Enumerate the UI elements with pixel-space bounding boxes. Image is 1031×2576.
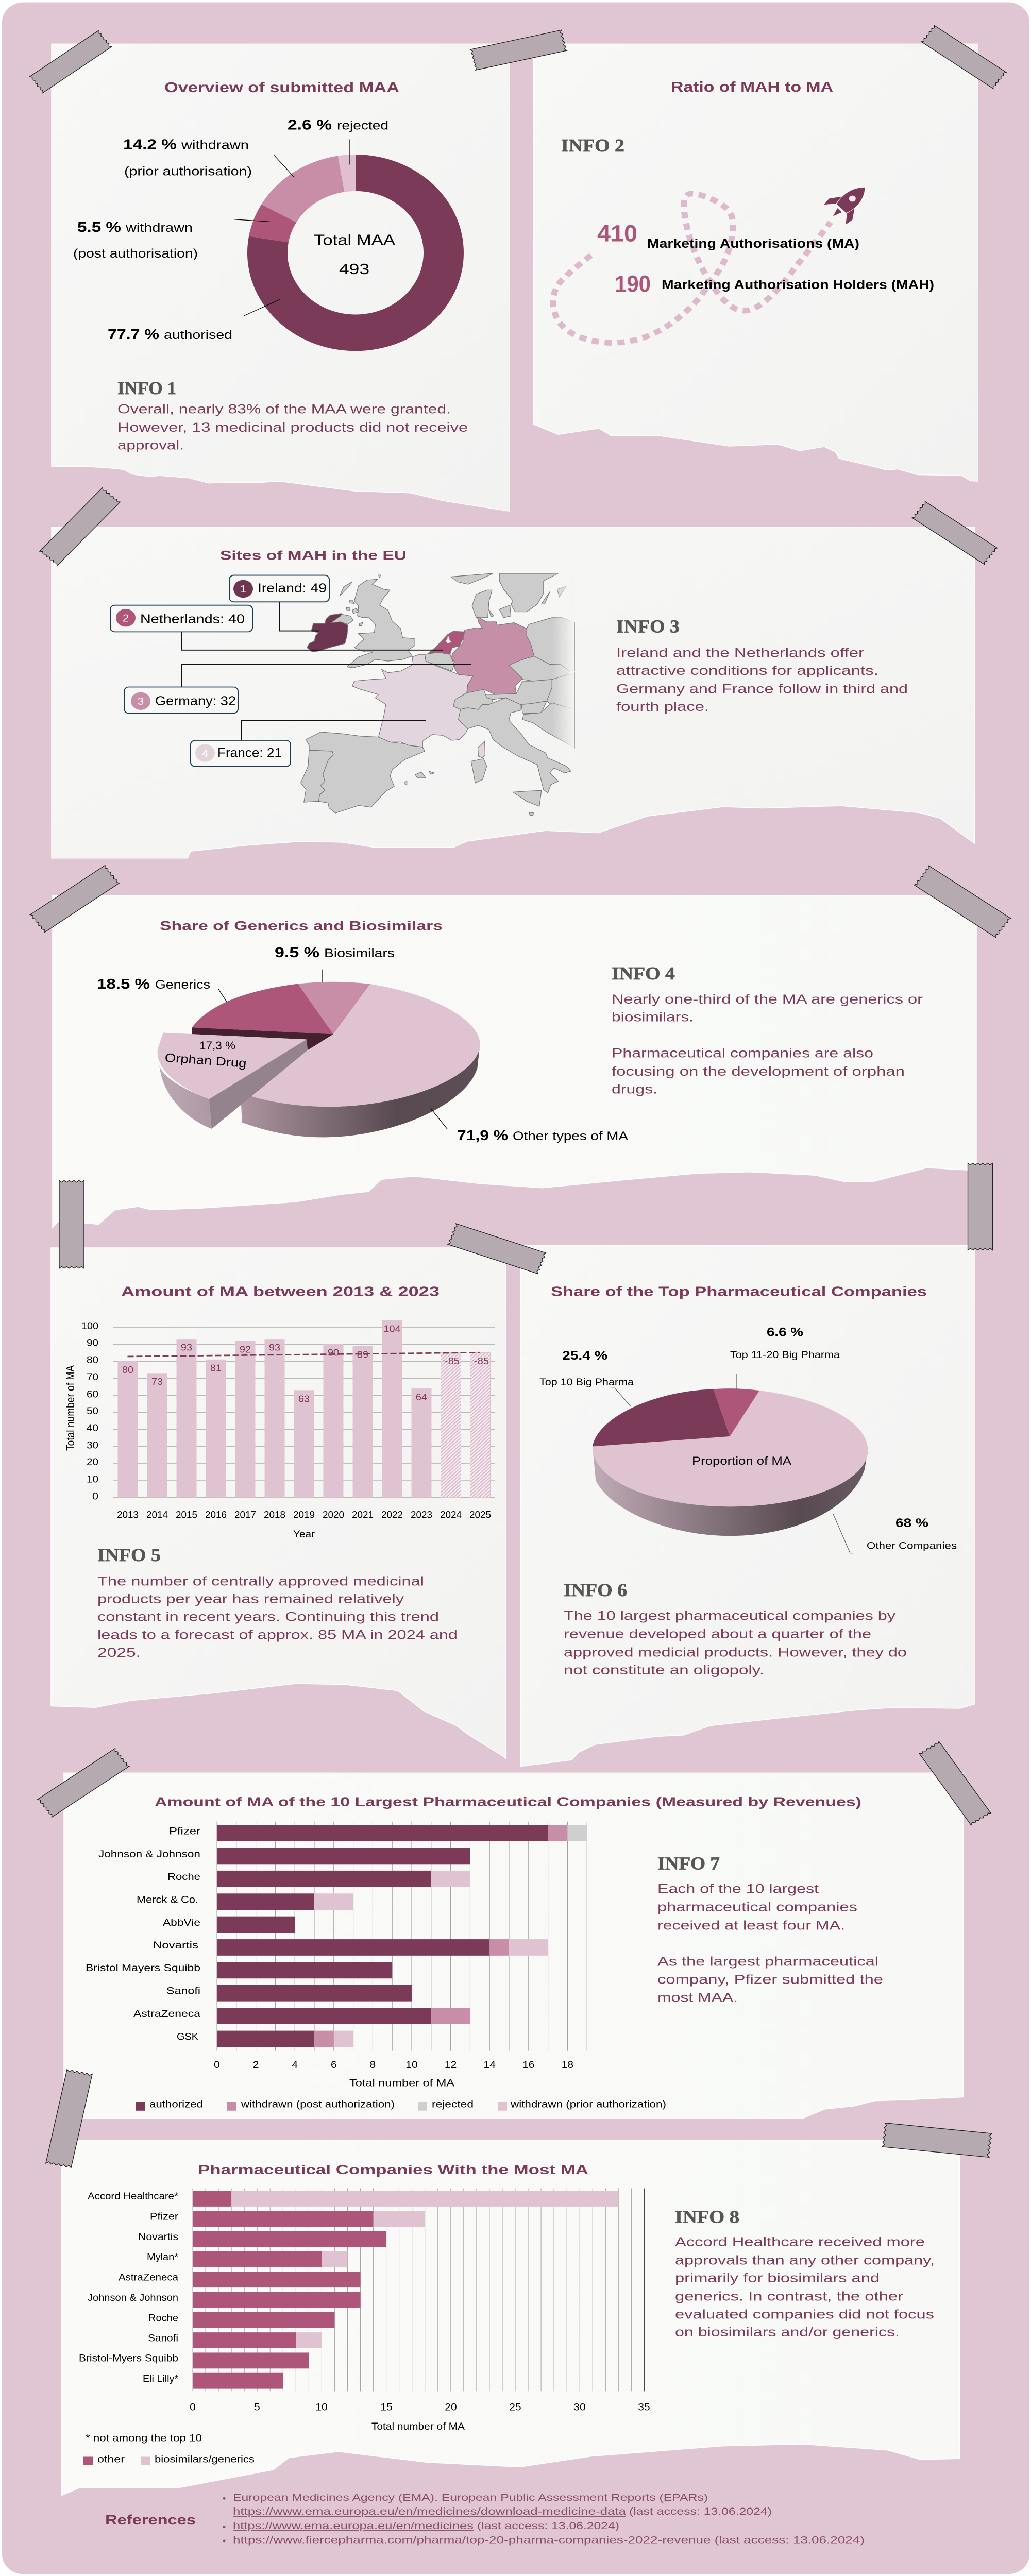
references list	[223, 2493, 865, 2546]
info 6 heading: INFO 6	[564, 1581, 627, 1600]
callout: Germany: Germany: 32	[155, 694, 236, 708]
x axis labels: 2014	[146, 1510, 168, 1520]
label: top 10: Top 10 Big Pharma	[539, 1377, 634, 1388]
x axis labels: 2025	[469, 1510, 491, 1520]
x axis labels: 35	[638, 2402, 650, 2413]
panel: share of the top pharmaceutical companies	[520, 1245, 974, 1767]
panel: sites of MAH in the EU	[52, 527, 975, 858]
donut chart	[247, 155, 464, 351]
company labels: Eli Lilly*	[143, 2374, 178, 2384]
references list: European Medicines Agency (EMA). European Public Assessment Reports (EPARs)	[233, 2493, 708, 2503]
donut centre label	[314, 232, 396, 278]
info 1 text: However, 13 medicinal products did not receive	[117, 421, 468, 435]
bar chart: MA per year: 89	[357, 1350, 368, 1360]
bar chart: MA per year: ~85	[471, 1357, 489, 1367]
label: biosimilars: Biosimilars	[324, 947, 395, 960]
label: withdrawn post	[73, 219, 198, 261]
x axis labels: 4	[292, 2060, 298, 2071]
x axis labels	[190, 2402, 650, 2413]
info 1 text: Overall, nearly 83% of the MAA were granted.	[117, 403, 451, 416]
info 6 text: approved medicial products. However, they do	[564, 1646, 907, 1659]
stat: 190 MAH: Marketing Authorisation Holders (MAH)	[662, 278, 934, 292]
company labels: AbbVie	[163, 1918, 200, 1928]
orphan drug label	[164, 1039, 247, 1070]
y axis title: Total number of MA	[64, 1365, 77, 1451]
info 7 text: received at least four MA.	[657, 1919, 845, 1933]
label: rejected: rejected	[337, 119, 388, 132]
bar chart: MA per year: ~85	[442, 1357, 460, 1367]
x axis labels: 20	[445, 2402, 457, 2413]
legend: authorized	[149, 2099, 203, 2110]
info 7 text: As the largest pharmaceutical	[657, 1955, 878, 1969]
y axis labels: 0	[92, 1491, 98, 1502]
heading: Overview of submitted MAA	[164, 79, 399, 95]
info 4 text: focusing on the development of orphan	[612, 1065, 905, 1079]
label: other companies	[867, 1517, 957, 1551]
info 3 text: Germany and France follow in third and	[616, 682, 908, 696]
bar chart: MA per year: 93	[181, 1343, 192, 1353]
3D pie chart	[593, 1388, 868, 1536]
label: top 10: 25.4 %	[562, 1349, 607, 1363]
company labels: Sanofi	[166, 1986, 200, 1996]
x axis labels: 2023	[411, 1510, 432, 1520]
stacked bar chart: top 10 companies	[217, 1822, 587, 2051]
label: withdrawn post: (post authorisation)	[73, 247, 198, 261]
x axis labels: 10	[315, 2402, 328, 2413]
company labels: Bristol Mayers Squibb	[86, 1963, 200, 1974]
icon: rocket	[821, 177, 876, 227]
info 2 heading: INFO 2	[561, 136, 624, 156]
label: other types: 71,9 %	[457, 1127, 508, 1144]
company labels: Johnson & Johnson	[98, 1849, 200, 1860]
company labels: Sanofi	[148, 2333, 178, 2344]
legend	[136, 2099, 666, 2111]
info 1 text: approval.	[117, 438, 184, 452]
x axis labels: 30	[573, 2402, 586, 2413]
company labels: Mylan*	[147, 2252, 178, 2263]
label: generics: Generics	[155, 978, 210, 992]
x axis labels: 2024	[440, 1510, 462, 1520]
x axis labels: 2013	[117, 1510, 139, 1520]
info 1 text	[117, 403, 468, 452]
x axis labels: 2021	[352, 1510, 374, 1520]
label: authorised: authorised	[164, 329, 232, 342]
stat: 410 MA: Marketing Authorisations (MA)	[647, 237, 859, 251]
x axis labels: 0	[214, 2060, 220, 2071]
info 6 text	[564, 1609, 907, 1677]
paper sheet 8	[61, 2140, 960, 2496]
y axis labels: 50	[87, 1406, 98, 1417]
info 8 text: evaluated companies did not focus	[675, 2308, 934, 2321]
info 7 text: company, Pfizer submitted the	[657, 1973, 883, 1987]
info 5 text: constant in recent years. Continuing this trend	[97, 1610, 439, 1624]
leader lines	[218, 970, 447, 1129]
callout: Netherlands	[110, 605, 252, 632]
orphan drug label: 17,3 %	[199, 1039, 235, 1052]
country: Ireland	[307, 614, 348, 652]
paper sheet 3	[52, 527, 975, 858]
dotted rocket trail	[553, 194, 831, 343]
label: withdrawn post: withdrawn	[125, 222, 193, 235]
info 8 text: generics. In contrast, the other	[675, 2290, 904, 2303]
y axis labels: 100	[81, 1321, 98, 1332]
info 5 text: products per year has remained relatively	[97, 1592, 404, 1606]
panel: overview of submitted MAA	[52, 44, 509, 511]
heading: Share of the Top Pharmaceutical Companies	[551, 1284, 927, 1299]
country: Netherlands	[428, 631, 465, 654]
x axis labels: 8	[370, 2060, 376, 2071]
x axis labels: 2	[253, 2060, 259, 2071]
label: withdrawn prior: withdrawn	[181, 139, 249, 152]
info 8 text: approvals than any other company,	[675, 2254, 935, 2267]
x axis labels: 10	[405, 2060, 418, 2071]
company labels: Bristol-Myers Squibb	[79, 2353, 178, 2364]
callout: Germany	[124, 687, 238, 713]
x axis labels: 2017	[234, 1510, 256, 1520]
panel: ratio of MAH to MA	[533, 44, 977, 481]
label: generics	[97, 976, 210, 992]
info 6 text: The 10 largest pharmaceutical companies by	[564, 1609, 895, 1623]
label: rejected	[288, 117, 388, 133]
x axis labels	[117, 1510, 491, 1520]
label: rejected: 2.6 %	[288, 117, 332, 133]
label: other companies: 68 %	[895, 1517, 928, 1530]
info 8 text: Accord Healthcare received more	[675, 2235, 925, 2249]
y axis labels: 10	[87, 1474, 98, 1485]
bar chart: MA per year: 92	[240, 1345, 251, 1355]
label: generics: 18.5 %	[97, 976, 150, 992]
info 8 text: primarily for biosimilars and	[675, 2272, 880, 2285]
info 4 text: drugs.	[612, 1082, 657, 1096]
references list: (last access: 13.06.2024)	[477, 2521, 619, 2532]
heading: Amount of MA of the 10 Largest Pharmaceutical Companies (Measured by Revenues)	[155, 1794, 861, 1809]
x axis labels: 6	[331, 2060, 337, 2071]
info 3 text	[616, 647, 908, 714]
y axis labels: 60	[87, 1389, 98, 1400]
x axis labels: 2019	[293, 1510, 315, 1520]
references list: https://www.fiercepharma.com/pharma/top-20-pharma-companies-2022-revenue (last access: 13.06.2024)	[233, 2535, 865, 2546]
references heading: References	[105, 2512, 196, 2528]
label: biosimilars: 9.5 %	[275, 944, 319, 961]
country: France	[352, 654, 473, 747]
bar chart: MA per year: 90	[328, 1348, 339, 1358]
info 7 text	[657, 1883, 883, 2005]
y axis labels: 40	[87, 1423, 98, 1434]
info 7 text: most MAA.	[657, 1991, 738, 2005]
info 6 text: revenue developed about a quarter of the	[564, 1628, 871, 1641]
info 3 heading: INFO 3	[616, 617, 680, 636]
label: other types: Other types of MA	[513, 1130, 628, 1143]
x axis labels: 2022	[381, 1510, 403, 1520]
panel: amount of MA 2013-2023	[51, 1248, 506, 1758]
paper sheet 2	[533, 44, 977, 481]
x axis labels: 18	[562, 2060, 573, 2071]
label: authorised: 77.7 %	[108, 326, 159, 343]
y axis labels: 20	[87, 1457, 98, 1468]
label: authorised	[108, 326, 232, 343]
bar chart: MA per year: 63	[298, 1394, 310, 1404]
x axis labels: 5	[254, 2402, 260, 2413]
info 5 text: The number of centrally approved medicinal	[97, 1574, 424, 1588]
label: top 11-20	[730, 1326, 840, 1361]
company labels: AstraZeneca	[119, 2272, 179, 2283]
paper sheet 7	[64, 1773, 964, 2119]
info 6 text: not constitute an oligopoly.	[564, 1664, 764, 1677]
x axis labels: 2016	[205, 1510, 227, 1520]
legend: withdrawn (post authorization)	[241, 2099, 395, 2110]
x axis labels: 12	[445, 2060, 457, 2071]
y axis labels: 90	[87, 1337, 98, 1348]
panel: companies with the most MA	[61, 2140, 960, 2496]
legend: other	[97, 2454, 125, 2465]
paper sheet 1	[52, 44, 509, 511]
heading: Sites of MAH in the EU	[220, 548, 407, 563]
label: other companies: Other Companies	[867, 1540, 957, 1551]
callout lines	[181, 602, 471, 740]
label: withdrawn prior: 14.2 %	[123, 137, 177, 152]
info 4 text	[612, 993, 923, 1096]
paper sheet 4	[53, 895, 976, 1228]
callout: Ireland: 1	[240, 584, 246, 595]
leader lines	[611, 1374, 853, 1553]
y axis labels: 30	[87, 1440, 98, 1451]
callout: France	[191, 740, 291, 767]
3D pie chart	[158, 982, 480, 1137]
x axis labels: 0	[190, 2402, 196, 2413]
company labels: AstraZeneca	[133, 2009, 201, 2020]
x axis labels: 2015	[176, 1510, 197, 1520]
company labels: Novartis	[138, 2232, 178, 2243]
legend: biosimilars/generics	[155, 2454, 255, 2465]
paper sheet 5	[51, 1248, 506, 1758]
pie centre label: Proportion of MA	[692, 1454, 792, 1467]
info 4 text: Nearly one-third of the MA are generics or	[612, 993, 923, 1007]
stat: 190 MAH: 190	[615, 272, 651, 297]
leader lines	[234, 140, 349, 316]
callout: Ireland	[229, 575, 329, 602]
company labels: Novartis	[153, 1940, 198, 1951]
company labels: Pfizer	[169, 1826, 200, 1837]
y axis labels: 80	[87, 1355, 98, 1366]
y axis labels	[81, 1321, 98, 1502]
label: top 11-20: Top 11-20 Big Pharma	[730, 1350, 840, 1361]
callout: France: 4	[202, 748, 208, 759]
callout: France: France: 21	[217, 747, 282, 760]
info 5 text: leads to a forecast of approx. 85 MA in 2024 and	[97, 1629, 458, 1642]
legend: rejected	[432, 2099, 474, 2110]
x axis labels: 16	[522, 2060, 534, 2071]
legend: withdrawn (prior authorization)	[510, 2099, 666, 2110]
company labels: Pfizer	[150, 2211, 178, 2222]
x axis labels	[214, 2060, 573, 2071]
info 5 text: 2025.	[97, 1646, 141, 1660]
callout: Germany: 3	[138, 696, 144, 707]
x axis title: Total number of MA	[349, 2078, 455, 2089]
tapes	[29, 25, 1011, 2168]
legend	[83, 2454, 255, 2465]
info 7 heading: INFO 7	[657, 1854, 720, 1873]
stat: 410 MA: 410	[597, 221, 637, 247]
info 3 text: fourth place.	[616, 700, 709, 714]
label: top 10	[539, 1349, 634, 1388]
bar chart: MA per year: 73	[151, 1377, 163, 1387]
info 4 heading: INFO 4	[612, 963, 675, 983]
bar chart: MA per year: 64	[416, 1393, 428, 1403]
company labels	[79, 2191, 179, 2384]
map of western Europe	[301, 573, 574, 816]
label: top 11-20: 6.6 %	[767, 1326, 803, 1339]
info 8 text	[675, 2235, 935, 2340]
panel: share of generics and biosimilars	[53, 895, 976, 1228]
footnote: * not among the top 10	[86, 2433, 202, 2444]
x axis labels: 25	[509, 2402, 521, 2413]
trend line	[128, 1352, 480, 1357]
donut centre label: 493	[339, 261, 369, 278]
info 7 text: Each of the 10 largest	[657, 1883, 819, 1896]
country: Corsica	[478, 741, 485, 758]
info 8 text: on biosimilars and/or generics.	[675, 2326, 900, 2340]
stat: 190 MAH	[615, 272, 934, 297]
info 4 text: biosimilars.	[612, 1011, 694, 1024]
x axis title: Year	[293, 1529, 315, 1540]
label: withdrawn post: 5.5 %	[77, 219, 121, 235]
label: biosimilars	[275, 944, 395, 961]
panel: MA of the 10 largest companies	[64, 1773, 964, 2119]
references list: https://www.ema.europa.eu/en/medicines	[233, 2521, 474, 2532]
x axis labels: 2020	[323, 1510, 344, 1520]
y axis labels: 70	[87, 1372, 98, 1383]
company labels: Roche	[167, 1872, 200, 1883]
paper sheet 6	[520, 1245, 974, 1767]
stacked bar chart: most MA	[193, 2188, 644, 2391]
references list: (last access: 13.06.2024)	[629, 2506, 772, 2517]
lake	[446, 634, 451, 643]
info 3 text: attractive conditions for applicants.	[616, 664, 878, 678]
company labels: Accord Healthcare*	[88, 2191, 178, 2202]
company labels: Merck & Co.	[137, 1895, 198, 1905]
x axis labels: 14	[484, 2060, 496, 2071]
company labels: Roche	[148, 2313, 178, 2324]
heading: Amount of MA between 2013 & 2023	[121, 1284, 440, 1299]
info 7 text: pharmaceutical companies	[657, 1901, 857, 1914]
label: other types	[457, 1127, 628, 1144]
donut centre label: Total MAA	[314, 232, 396, 248]
country: Germany	[451, 617, 534, 694]
bar chart: MA per year: 104	[383, 1324, 401, 1334]
info 3 text: Ireland and the Netherlands offer	[616, 647, 865, 660]
company labels: GSK	[177, 2032, 199, 2042]
callout: Ireland: Ireland: 49	[258, 582, 327, 596]
company labels: Johnson & Johnson	[88, 2293, 178, 2303]
heading: Ratio of MAH to MA	[671, 79, 833, 95]
company labels	[86, 1826, 201, 2042]
stat: 410 MA	[597, 221, 859, 251]
label: withdrawn prior	[123, 137, 252, 178]
map fade	[552, 573, 574, 757]
bar chart: MA per year: 93	[269, 1343, 280, 1353]
heading: Pharmaceutical Companies With the Most MA	[198, 2162, 588, 2177]
info 8 heading: INFO 8	[675, 2207, 739, 2227]
info 5 text	[97, 1574, 458, 1660]
bar chart: MA per year	[113, 1320, 495, 1498]
x axis title: Total number of MA	[371, 2421, 465, 2432]
orphan drug label: Orphan Drug	[164, 1052, 247, 1070]
references list: https://www.ema.europa.eu/en/medicines/download-medicine-data	[233, 2506, 627, 2517]
info 5 heading: INFO 5	[97, 1546, 161, 1565]
label: withdrawn prior: (prior authorisation)	[124, 165, 252, 178]
x axis labels: 2018	[264, 1510, 285, 1520]
callout: Netherlands: 2	[123, 613, 129, 624]
heading: Share of Generics and Biosimilars	[160, 919, 443, 933]
info 1 heading: INFO 1	[117, 379, 176, 398]
bar chart: MA per year: 81	[210, 1363, 222, 1374]
x axis labels: 15	[380, 2402, 393, 2413]
bar chart: MA per year: 80	[122, 1365, 133, 1376]
callout: Netherlands: Netherlands: 40	[140, 613, 245, 626]
info 4 text: Pharmaceutical companies are also	[612, 1047, 873, 1060]
